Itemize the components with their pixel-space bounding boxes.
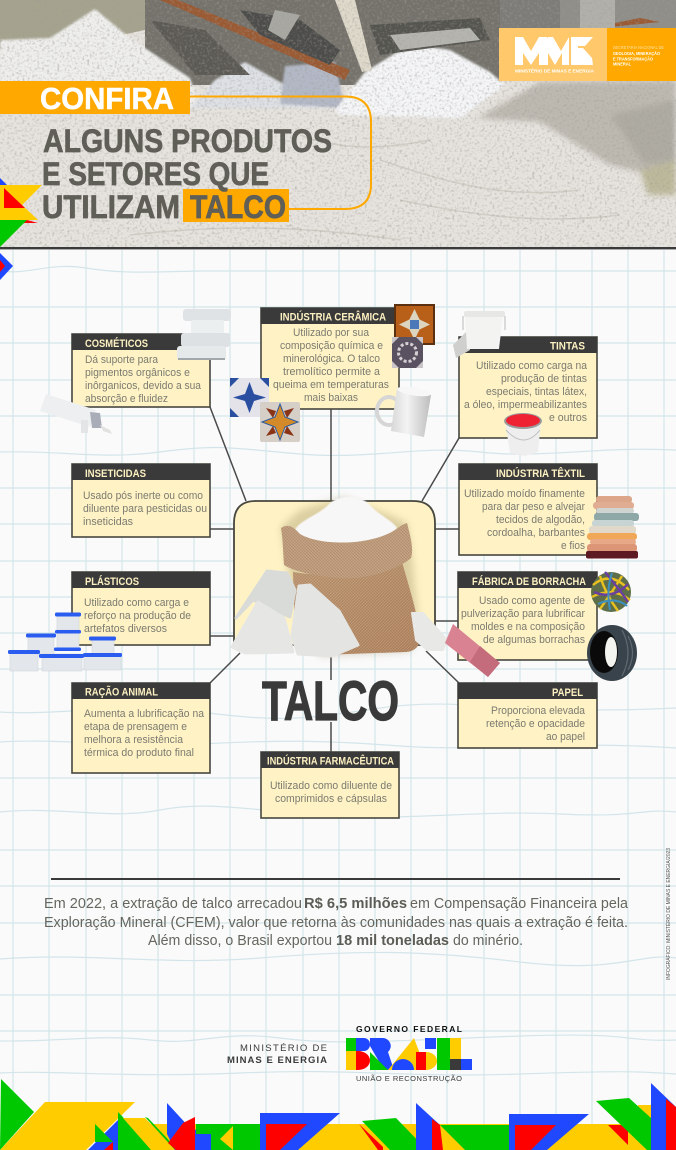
panel: fabrica de borracha: pulverização para lubrificar <box>461 608 585 620</box>
panel: fabrica de borracha: Usado como agente de <box>479 595 585 607</box>
panel: cosmeticos: COSMÉTICOS <box>85 337 148 350</box>
heading: title: UTILIZAM <box>42 189 180 225</box>
secretariat text: E TRANSFORMAÇÃO <box>613 56 654 61</box>
panel: industria textil: para dar peso e alvejar <box>482 501 585 513</box>
panel: industria ceramica: mais baixas <box>304 392 358 404</box>
panel: cosmeticos: pigmentos orgânicos e <box>85 367 190 379</box>
panel: racao animal: RAÇÃO ANIMAL <box>85 686 158 698</box>
text block: CFEM paragraph <box>44 896 629 949</box>
secretariat text: SECRETARIA NACIONAL DE <box>613 45 664 50</box>
MME wordmark: MINISTÉRIO DE MINAS E ENERGIA <box>515 66 595 74</box>
panel: plasticos <box>72 572 210 645</box>
panel: center talc box <box>234 501 435 645</box>
panel: industria ceramica: tremolítico permite a <box>283 366 381 378</box>
icon: red paint can <box>504 413 542 456</box>
BRASIL mark <box>346 1038 472 1070</box>
heading: title <box>42 123 332 225</box>
text block: CFEM paragraph: em Compensação Financeira pela <box>410 896 629 912</box>
panel: racao animal <box>72 683 210 773</box>
panel: papel: ao papel <box>546 731 585 743</box>
panel: industria ceramica: minerológica. O talco <box>283 353 380 365</box>
panel: industria textil: e fios <box>561 540 585 552</box>
icon: white mug <box>377 385 431 437</box>
panel: papel <box>458 683 597 748</box>
header photo: talc quarry <box>0 0 676 248</box>
logo: governo federal brasil <box>346 1024 472 1083</box>
panel: industria textil <box>459 464 597 555</box>
icon: blue azulejo tile <box>230 378 269 417</box>
panel: industria ceramica: Utilizado por sua <box>293 327 370 339</box>
text block: CFEM paragraph: 18 mil toneladas <box>336 933 449 949</box>
panel: papel: PAPEL <box>552 687 583 699</box>
panel: plasticos: reforço na produção de <box>84 610 191 622</box>
panel: cosmeticos <box>72 334 210 407</box>
divider rule <box>51 878 620 880</box>
decorative shapes: bottom band <box>0 1079 676 1150</box>
MME mark <box>515 37 593 65</box>
panel: racao animal: etapa de prensagem e <box>84 721 187 733</box>
panel: inseticidas <box>72 464 210 537</box>
icon: talc sack and rocks <box>232 497 447 656</box>
panel: inseticidas: INSETICIDAS <box>85 468 146 480</box>
icon: soap bars <box>177 309 231 360</box>
panel: fabrica de borracha <box>458 572 597 660</box>
panel: industria textil: cordoalha, barbantes <box>487 527 585 539</box>
panel: tintas: produção de tintas <box>501 373 587 385</box>
icon: white paint bucket <box>453 311 505 358</box>
panel: tintas: TINTAS <box>550 340 585 352</box>
logo: ministerio text: MINAS E ENERGIA <box>227 1055 327 1066</box>
icon: cream tube <box>40 394 112 434</box>
icon: orange tile <box>395 305 434 344</box>
panel: papel: Proporciona elevada <box>491 705 586 717</box>
panel: papel: retenção e opacidade <box>486 718 585 730</box>
secretariat text <box>613 45 664 66</box>
panel: tintas: especiais, tintas látex, <box>486 386 587 398</box>
panel: industria ceramica: queima em temperaturas <box>273 379 389 391</box>
panel: industria textil: INDÚSTRIA TÊXTIL <box>496 467 585 480</box>
text block: CFEM paragraph: R$ 6,5 milhões <box>304 896 407 912</box>
text block: CFEM paragraph: do minério. <box>453 933 523 949</box>
text block: CFEM paragraph: Além disso, o Brasil exportou <box>148 933 332 949</box>
logo: governo federal brasil: UNIÃO E RECONSTRUÇÃO <box>356 1074 462 1083</box>
title callout outline <box>190 96 371 209</box>
panel: industria textil: Utilizado moído finamente <box>464 488 585 500</box>
panel: inseticidas: inseticidas <box>83 516 133 528</box>
panel: tintas <box>459 337 597 438</box>
header divider line <box>0 247 676 249</box>
secretariat text: MINERAL <box>613 62 631 66</box>
connector lines <box>210 407 459 752</box>
panel: racao animal: térmica do produto final <box>84 747 194 759</box>
heading: title: ALGUNS PRODUTOS <box>43 123 332 159</box>
icon: car tire <box>587 625 637 681</box>
panel: tintas: a óleo, impermeabilizantes <box>464 399 587 411</box>
secretariat text: GEOLOGIA, MINERAÇÃO <box>613 51 661 56</box>
panel: fabrica de borracha: moldes e na composição <box>471 621 585 633</box>
heading: title: TALCO <box>190 189 286 225</box>
panel: racao animal: melhora a resistência <box>84 734 184 746</box>
heading: title: E SETORES QUE <box>42 156 269 192</box>
panel: industria farmaceutica <box>261 752 399 818</box>
panel: racao animal: Aumenta a lubrificação na <box>84 708 205 720</box>
icon: stack of clothes <box>586 496 639 558</box>
panel: industria ceramica: INDÚSTRIA CERÂMICA <box>280 310 386 324</box>
panel: plasticos: Utilizado como carga e <box>84 597 189 609</box>
panel: industria ceramica <box>261 308 399 409</box>
panel: plasticos: artefatos diversos <box>84 623 167 635</box>
text block: CFEM paragraph: Em 2022, a extração de talco arrecadou <box>44 896 302 912</box>
icon: dark tile <box>392 337 423 368</box>
panel: fabrica de borracha: FÁBRICA DE BORRACHA <box>472 575 586 588</box>
panel: cosmeticos: Dá suporte para <box>85 354 159 366</box>
panel: plasticos: PLÁSTICOS <box>85 575 139 588</box>
panel: cosmeticos: absorção e fluidez <box>85 393 168 405</box>
icon: pink eraser <box>445 624 500 677</box>
logo: ministerio text: MINISTÉRIO DE <box>240 1043 327 1054</box>
panel: tintas: Utilizado como carga na <box>476 360 588 372</box>
panel: inseticidas: Usado pós inerte ou como <box>83 490 203 502</box>
panel: industria farmaceutica: Utilizado como diluente de <box>270 780 392 792</box>
logo: MME ministry badge <box>499 28 676 81</box>
credit: vertical text: INFOGRÁFICO: MINISTÉRIO DE MINAS E ENERGIA/2023 <box>665 848 672 980</box>
icon: rubber band ball <box>591 572 631 612</box>
logo: governo federal brasil: GOVERNO FEDERAL <box>356 1024 462 1034</box>
panel: industria textil: tecidos de algodão, <box>496 514 585 526</box>
decorative shapes: left edge <box>0 178 42 280</box>
heading: confira: CONFIRA <box>40 81 174 116</box>
icon: plastic containers <box>8 612 122 671</box>
panel: industria farmaceutica: comprimidos e cápsulas <box>275 793 387 805</box>
panel: fabrica de borracha: de algumas borrachas <box>483 634 585 646</box>
heading: TALCO: TALCO <box>262 669 399 732</box>
panel: tintas: e outros <box>549 412 587 424</box>
text block: CFEM paragraph: Exploração Mineral (CFEM), valor que retorna às comunidades nas quais a extração é feita. <box>44 915 628 931</box>
panel: industria farmaceutica: INDÚSTRIA FARMACÊUTICA <box>267 754 394 768</box>
panel: industria ceramica: composição química e <box>280 340 383 352</box>
icon: brown azulejo tile <box>260 402 300 442</box>
panel: cosmeticos: inôrganicos, devido a sua <box>85 380 202 392</box>
logo: ministerio text <box>227 1043 327 1066</box>
panel: inseticidas: diluente para pesticidas ou <box>83 503 207 515</box>
